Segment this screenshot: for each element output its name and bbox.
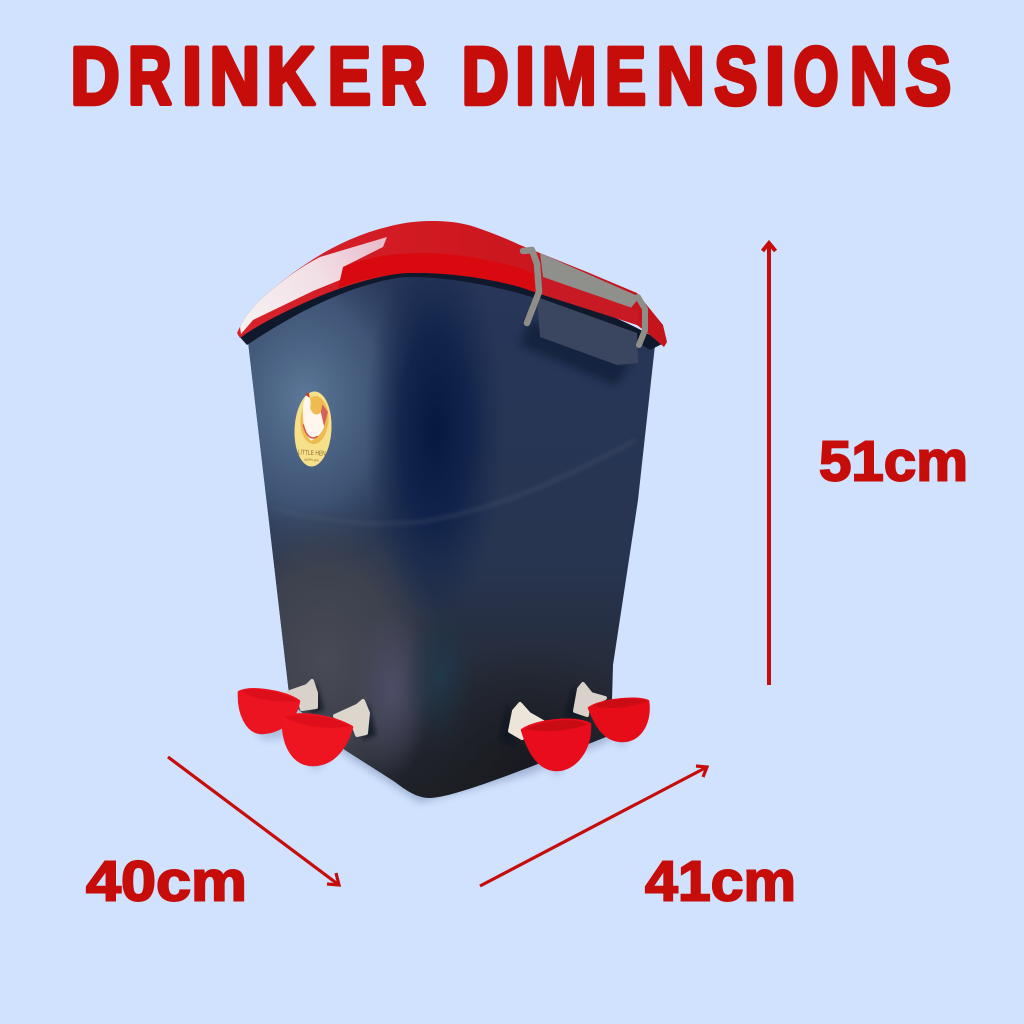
gray handle recess: [540, 253, 640, 309]
depth arrow 41cm: [480, 766, 707, 886]
title: R: [128, 31, 172, 122]
lid red lip by handle: [537, 275, 638, 325]
title: S: [714, 30, 757, 122]
title: N: [210, 31, 260, 122]
title: D: [70, 30, 120, 121]
depth label 41cm: 41cm: [645, 850, 796, 914]
title: N: [657, 29, 705, 122]
height label: 51cm: [819, 430, 968, 494]
front flap: [537, 297, 638, 365]
logo sticker: SUPPLIES: [304, 458, 319, 462]
central dark corner: [372, 282, 490, 576]
height arrow: [762, 243, 776, 685]
left face highlight: [248, 284, 395, 540]
lower lilac reflection: [366, 635, 418, 758]
title: R: [380, 30, 426, 122]
clip shadows: [310, 682, 580, 745]
title: K: [267, 30, 315, 122]
title: I: [515, 31, 535, 122]
left latch: [523, 250, 539, 323]
clip front left: [335, 701, 368, 735]
corner teal tone: [417, 655, 457, 722]
title: D: [462, 30, 509, 122]
cup shadows: [240, 700, 648, 777]
right latch: [638, 297, 645, 345]
lid glare: [240, 237, 387, 334]
cup front right: [522, 720, 590, 770]
drinker bin with cups: [237, 221, 667, 806]
logo sticker: LITTLE HEN: [298, 449, 326, 458]
logo sticker: [293, 391, 333, 467]
title: N: [850, 29, 898, 122]
red lid: [237, 221, 667, 347]
lid underside: [238, 268, 664, 350]
right lower tone: [432, 689, 606, 798]
title: O: [794, 31, 839, 122]
title: S: [906, 30, 951, 121]
clip front right: [510, 704, 543, 738]
bin body: [248, 277, 655, 798]
flap shadow: [520, 320, 630, 385]
cup back right: [589, 699, 649, 741]
clip back left: [287, 681, 316, 709]
title: E: [605, 30, 646, 122]
title: M: [542, 30, 597, 122]
lower left tone: [271, 539, 422, 775]
title: I: [765, 31, 785, 122]
cup back left: [239, 689, 299, 733]
lid rim highlight: [338, 253, 537, 293]
bin soft shadow: [290, 700, 611, 803]
title: [70, 29, 951, 122]
body crease: [382, 442, 632, 524]
title: E: [328, 30, 371, 122]
title: I: [182, 31, 202, 122]
clip back right: [575, 684, 605, 715]
width label 40cm: 40cm: [86, 850, 247, 914]
width arrow 40cm: [168, 757, 339, 885]
cup front left: [283, 714, 352, 765]
